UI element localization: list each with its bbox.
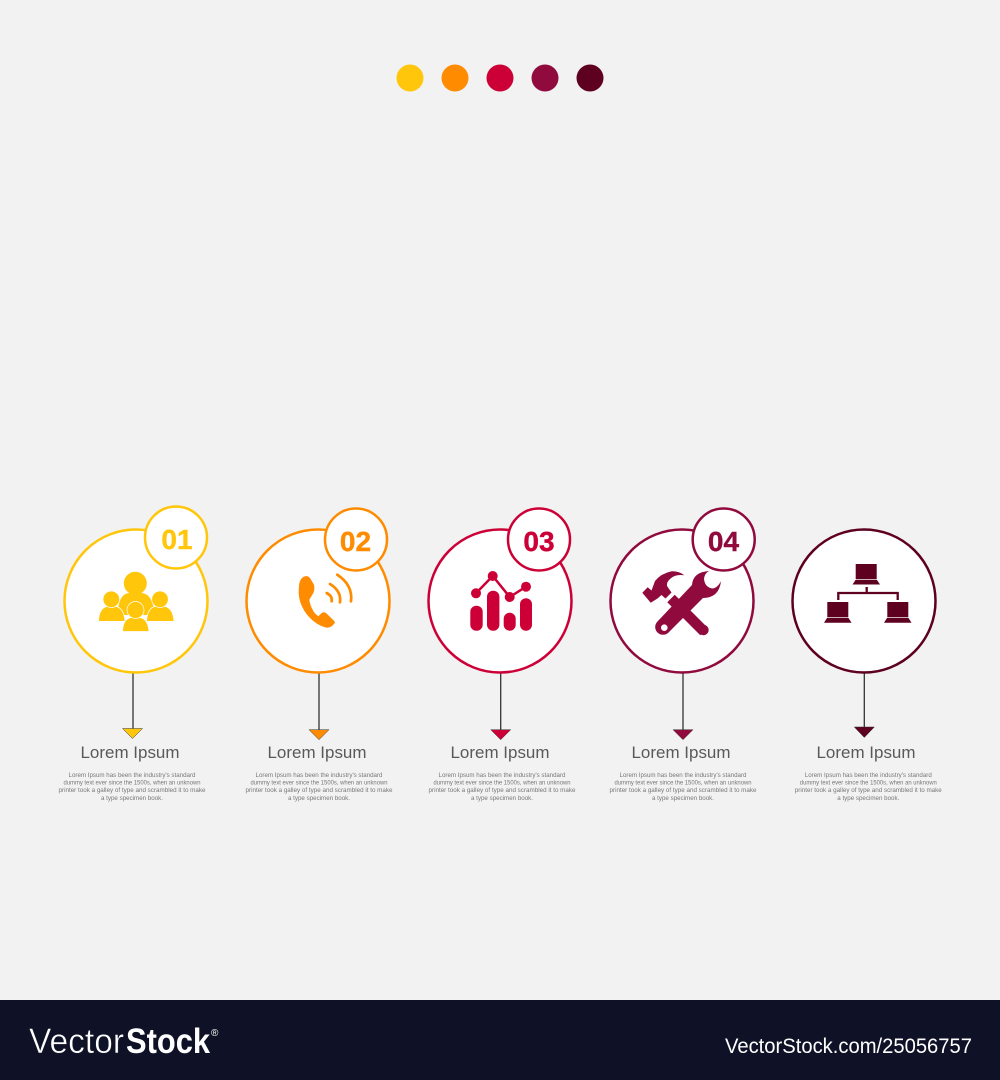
connector line 01: [132, 673, 134, 732]
main circle 05: [792, 530, 936, 672]
footer logo: Vector: [29, 1022, 124, 1061]
badge 03: 03: [523, 526, 555, 557]
text block 04: a type specimen book.: [652, 796, 714, 802]
main circle 02: [246, 530, 390, 672]
badge 04: [693, 508, 755, 570]
text block 04: dummy text ever since the 1500s, when an unknown: [614, 781, 752, 787]
footer logo: ®: [211, 1028, 219, 1039]
text block 04: Lorem Ipsum has been the industry's standard: [620, 773, 746, 779]
badge 01: 01: [161, 524, 193, 555]
main circle 04: [610, 530, 754, 672]
badge 02: 02: [340, 526, 371, 557]
text block 03: a type specimen book.: [471, 796, 533, 802]
text block 02: a type specimen book.: [288, 796, 350, 802]
arrow 03: [491, 730, 511, 740]
badge 04: 04: [708, 526, 739, 557]
panel: step 01: [58, 506, 208, 802]
connector line 02: [318, 673, 320, 734]
text block 03: Lorem Ipsum has been the industry's standard: [438, 773, 566, 779]
text block 04: [610, 773, 757, 802]
text block 01: a type specimen book.: [101, 796, 163, 802]
main circle 01: [64, 530, 208, 672]
arrow 01: [122, 728, 142, 738]
main circle 03: [428, 530, 572, 672]
panel: step 02: [246, 508, 393, 802]
panel: step 05: [792, 530, 942, 802]
badge 02: [325, 508, 387, 570]
text block 05: printer took a galley of type and scrambled it to make: [795, 788, 942, 794]
text block 05: [795, 773, 942, 802]
icon: network of laptops: [824, 564, 912, 623]
text block 01: Lorem Ipsum has been the industry's standard: [68, 773, 196, 779]
text block 03: [428, 773, 576, 802]
text block 02: dummy text ever since the 1500s, when an unknown: [250, 781, 388, 787]
heading 04: Lorem Ipsum: [632, 743, 730, 762]
text block 04: printer took a galley of type and scrambled it to make: [610, 788, 757, 794]
text block 03: dummy text ever since the 1500s, when an unknown: [434, 781, 570, 787]
icon: phone: [299, 575, 351, 628]
heading 02: Lorem Ipsum: [268, 743, 366, 762]
heading 01: Lorem Ipsum: [80, 743, 180, 762]
footer logo: Stock: [126, 1022, 210, 1061]
panel: step 04: [610, 508, 757, 802]
text block 05: a type specimen book.: [837, 796, 900, 802]
badge 03: [508, 508, 570, 570]
text block 01: dummy text ever since the 1500s, when an unknown: [64, 781, 200, 787]
panel: step 03: [428, 508, 576, 802]
heading 05: Lorem Ipsum: [816, 743, 916, 762]
colour dots row: [396, 64, 604, 92]
arrow 02: [309, 730, 329, 740]
badge 01: [145, 506, 207, 568]
connector line 05: [863, 673, 865, 732]
icon: hammer and wrench: [642, 571, 721, 635]
arrow 05: [854, 727, 874, 738]
text block 01: [58, 773, 206, 802]
text block 01: printer took a galley of type and scrambled it to make: [58, 788, 206, 794]
text block 05: Lorem Ipsum has been the industry's standard: [805, 773, 932, 779]
arrow 04: [673, 730, 693, 740]
icon: bar and line chart: [470, 571, 532, 631]
connector line 04: [682, 673, 684, 734]
text block 05: dummy text ever since the 1500s, when an unknown: [800, 781, 937, 787]
footer logo: [29, 1022, 219, 1061]
text block 02: [246, 773, 393, 802]
icon: people: [98, 572, 174, 632]
footer image id: VectorStock.com/25056757: [725, 1035, 972, 1058]
text block 03: printer took a galley of type and scrambled it to make: [428, 788, 576, 794]
heading 03: Lorem Ipsum: [450, 743, 550, 762]
footer bar: [0, 1000, 1000, 1080]
connector line 03: [500, 673, 502, 734]
text block 02: Lorem Ipsum has been the industry's standard: [256, 773, 382, 779]
text block 02: printer took a galley of type and scrambled it to make: [246, 788, 393, 794]
